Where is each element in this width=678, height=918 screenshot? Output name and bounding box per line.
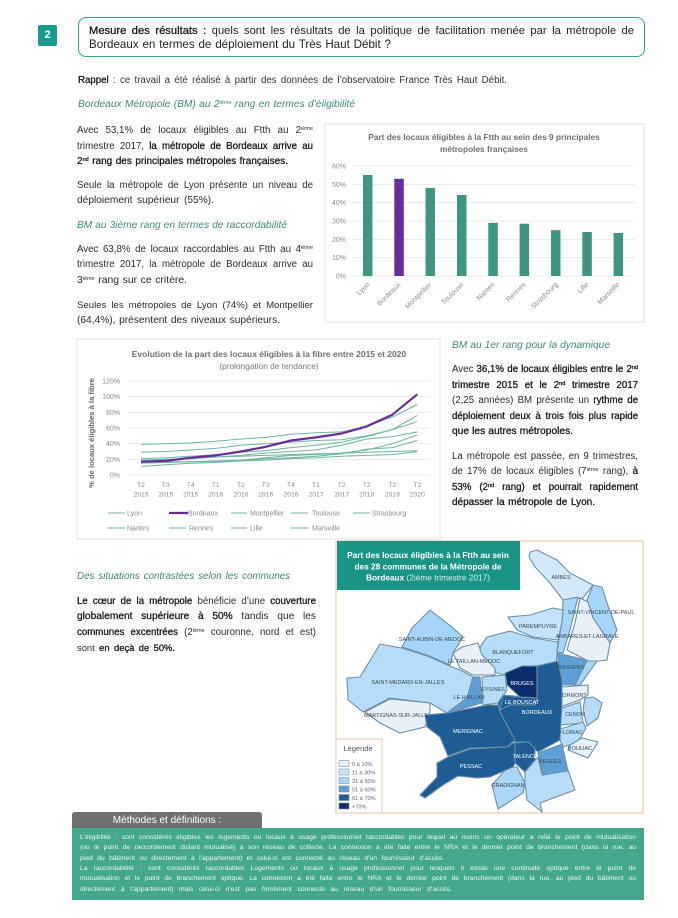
line chart: evolution 2015 to 2020: 2016 [233,492,249,498]
text: connectability figures: trimestre 2017, la métropole de Bordeaux arrive au [77,259,313,270]
map title banner: Bordeaux (2ième trimestre 2017) [366,572,490,582]
commune: Ambès [529,550,593,600]
commune: Floirac [557,722,586,747]
text: progress in 9 quarters: dépasser la métropole de Lyon. [452,497,595,508]
heading: contrasted situations: Des situations contrastées selon les communes [77,571,290,582]
definitions box [72,828,644,900]
bar chart: eligible premises in 9 metropolises: Lyon [356,281,371,297]
commune labels: AMBARES-ET-LAGRAVE [556,634,619,640]
commune labels: BEGLES [539,759,561,765]
text: progress in 9 quarters: 53% (2nd rang) et pourrait rapidement [452,482,638,493]
line chart: evolution 2015 to 2020: T2 [338,482,346,489]
heading: connectability rank: BM au 3ième rang en termes de raccordabilité [77,220,287,231]
text: municipalities coverage: Le cœur de la métropole bénéficie d’une couverture [77,596,316,606]
line chart: evolution 2015 to 2020: T4 [287,482,295,489]
text: deployment pace [452,364,638,437]
commune: Saint-Aubin-de-Médoc [402,610,463,665]
line chart: evolution 2015 to 2020: 2015 [133,492,149,498]
map legend: 11 à 30% [352,770,375,776]
bar chart: eligible premises in 9 metropolises: 20% [332,237,346,244]
commune: Pessac [420,742,517,798]
methods tab heading [72,812,262,828]
line chart: evolution 2015 to 2020: (prolongation de tendance) [219,361,319,371]
line chart: evolution 2015 to 2020: T4 [187,482,195,489]
line chart: evolution 2015 to 2020: 2016 [258,492,273,498]
question box: Bordeaux en termes de déploiement du Très Haut Débit ? [89,38,391,51]
text: progress in 9 quarters [452,450,638,508]
map panel: 28 municipalities: LE BOUSCAT [505,700,540,706]
text: deployment pace: déploiement deux à trois fois plus rapide [452,411,638,422]
definitions box: La raccordabilité : sont considérés raccordables Logements ou locaux à usage professionnel pour lesquels il existe une continuité optique entre le point de [80,865,636,872]
text: higher metropolises [77,300,313,326]
commune: Ambarès-et-Lagrave [567,598,610,662]
line chart: evolution 2015 to 2020: 2015 [158,492,173,498]
map legend: 0 à 10% [352,762,373,768]
line chart: evolution 2015 to 2020: Marseille [312,526,340,532]
commune: Cenon [560,702,583,725]
commune labels: AMBES [551,575,571,581]
commune: Parempuyre [508,608,563,640]
question box [78,17,645,57]
line chart: evolution 2015 to 2020: 0% [110,472,120,480]
question box: Mesure des résultats : quels sont les résultats de la politique de facilitation menée par la métropole de [89,25,634,37]
text: eligibility figures: Avec 53,1% de locaux éligibles au Ftth au 2ième [77,125,313,136]
commune labels: FLOIRAC [559,730,583,736]
line chart: evolution 2015 to 2020: 2016 [208,492,223,498]
commune: Mérignac [425,705,515,756]
commune labels: CENON [565,712,585,718]
line chart: evolution 2015 to 2020: % de locaux éligibles à la fibre [87,378,96,488]
commune labels: LE HAILLAN [453,695,485,701]
commune: Bassens [557,653,587,685]
line chart: evolution 2015 to 2020: 2018 [359,492,374,498]
commune labels: BOULIAC [568,746,592,752]
text: higher metropolises: (64,4%), présentent des niveaux supérieurs. [77,315,280,326]
line chart: evolution 2015 to 2020: Lille [250,526,263,532]
bar chart: eligible premises in 9 metropolises: Rennes [505,281,528,303]
commune: Bègles [538,744,568,775]
bar chart: eligible premises in 9 metropolises: Lille [577,281,590,295]
map legend: +70% [352,804,366,810]
line chart: evolution 2015 to 2020: 40% [106,441,120,448]
commune: Talence [515,742,535,772]
bar chart: eligible premises in 9 metropolises: Part des locaux éligibles à la Ftth au sein des 9 principales [368,132,600,142]
line chart: evolution 2015 to 2020: Strasbourg [372,510,406,518]
map panel: 28 municipalities: BORDEAUX [522,710,553,716]
map legend: 51 à 60% [352,788,376,794]
commune: Artigues [583,697,602,726]
map panel: 28 municipalities: PESSAC [460,764,482,770]
line chart: evolution 2015 to 2020: T2 [363,482,371,489]
commune: Bordeaux [498,661,562,752]
commune labels: PAREMPUYRE [519,624,557,630]
bar chart: eligible premises in 9 metropolises: Nantes [476,281,497,302]
text: Lyon comparison: Seule la métropole de Lyon présente un niveau de [77,180,313,190]
text: eligibility figures: trimestre 2017, la métropole de Bordeaux arrive au [77,141,313,152]
text: progress in 9 quarters: La métropole est passée, en 9 trimestres, [452,450,638,462]
text: progress in 9 quarters: de 17% de locaux éligibles (7ième rang), à [452,466,638,477]
definitions box: directement à l’appartement) mais celui-ci n’est pas forcément connecté au réseau d’un fournisseur d’accès. [80,886,452,893]
definitions box: pied du bâtiment ou directement à l’appartement) et celui-ci est connecté au réseau d’un fournisseur d’accès. [80,854,444,862]
map legend: 31 à 50% [352,779,376,785]
bar chart: eligible premises in 9 metropolises: 50% [332,182,346,189]
line chart: evolution 2015 to 2020: T2 [237,482,245,489]
line chart: evolution 2015 to 2020: T2 [388,482,396,489]
commune labels: SAINT-VINCENT-DE-PAUL [568,610,634,616]
line chart: evolution 2015 to 2020: 2017 [334,492,349,498]
commune: Eysines [482,675,507,705]
line chart: evolution 2015 to 2020: 60% [106,426,120,432]
line chart: evolution 2015 to 2020: Bordeaux [188,510,218,518]
line chart: evolution 2015 to 2020: T1 [312,482,320,489]
bar chart: eligible premises in 9 metropolises: 30% [332,218,346,226]
line chart: evolution 2015 to 2020: T3 [262,482,270,489]
line chart: evolution 2015 to 2020: Toulouse [312,510,340,518]
map title banner [337,541,520,590]
map title banner: Part des locaux éligibles à la Ftth au sein [347,550,509,560]
map panel: 28 municipalities: BRUGES [510,681,534,687]
commune: Saint-Vincent-de-Paul [587,585,617,643]
heading: eligibility rank: Bordeaux Métropole (BM) au 2ième rang en termes d’éligibilité [78,99,355,110]
line chart: evolution 2015 to 2020: 2016 [283,492,299,498]
commune: Lormont [560,685,588,707]
line chart: evolution 2015 to 2020: T3 [162,482,170,489]
bar chart: eligible premises in 9 metropolises: Marseille [597,281,621,306]
bar chart: eligible premises in 9 metropolises: Strasbourg [530,281,559,311]
heading: dynamics rank: BM au 1er rang pour la dynamique [452,340,610,351]
text: deployment pace: (2,25 années) BM présente un rythme de [452,395,638,406]
commune labels: BLANQUEFORT [492,650,534,656]
commune labels: SAINT-MEDARD-EN-JALLES [372,680,445,686]
line chart: evolution 2015 to 2020: Evolution de la part des locaux éligibles à la fibre entre 2015 et 2020 [132,349,406,359]
text: deployment pace: que les autres métropoles. [452,426,573,437]
text: Lyon comparison [77,180,313,206]
commune: Martignas-sur-Jalle [365,699,430,733]
commune: Le Bouscat [500,695,537,710]
text: connectability figures: Avec 63,8% de locaux raccordables au Ftth au 4ième [77,244,313,254]
bar chart: eligible premises in 9 metropolises: 40% [332,200,346,207]
line chart: evolution 2015 to 2020: 80% [106,410,120,417]
commune labels [364,575,634,789]
text: deployment pace: Avec 36,1% de locaux éligibles entre le 2nd [452,364,638,375]
commune: Bouliac [568,738,598,758]
line chart: evolution 2015 to 2020: Nantes [127,526,150,532]
section number badge: 2 [44,29,51,41]
commune: Blanquefort [480,631,558,675]
bar chart: eligible premises in 9 metropolises: Montpellier [404,281,434,311]
line chart: evolution 2015 to 2020: 20% [106,457,120,464]
reminder line: Rappel : ce travail a été réalisé à partir des données de l’observatoire France Très Haut Débit. [78,75,507,86]
text: municipalities coverage: sont en deçà de 50%. [77,642,175,653]
text: higher metropolises: Seules les métropoles de Lyon (74%) et Montpellier [77,300,313,310]
line chart: evolution 2015 to 2020: 2015 [183,492,198,498]
bar chart: eligible premises in 9 metropolises: 60% [332,164,346,170]
definitions box: mutualisation et le point de branchement optique. La connexion a été faite entre le NRA et le dernier point de branchement (dans la rue, au pied du bâtiment ou [80,875,636,882]
text: eligibility figures [77,125,313,167]
text: municipalities coverage: communes excentrées (2ième couronne, nord et est) [77,627,316,638]
line chart: evolution 2015 to 2020: Montpellier [250,510,285,518]
line chart: evolution 2015 to 2020: 2017 [308,492,324,498]
text: deployment pace: trimestre 2015 et le 2nd trimestre 2017 [452,380,638,391]
line chart: evolution 2015 to 2020: 2019 [385,492,400,498]
commune: Carbon-Blanc [575,661,597,685]
commune: Bruges [505,666,537,698]
line chart: evolution 2015 to 2020: 120% [102,378,120,386]
line chart: evolution 2015 to 2020 [76,338,440,540]
map legend: Légende [343,744,373,753]
bar chart: eligible premises in 9 metropolises: 10% [332,255,346,262]
commune: Villenave-d'Ornon [525,757,575,812]
text: municipalities coverage [77,596,316,654]
map legend [336,739,382,813]
text: connectability figures [77,244,313,286]
bar chart: eligible premises in 9 metropolises [324,124,644,322]
definitions box: (ou le point de raccordement distant mutualisé) à son réseau de collecte. La connexion a été faite entre le NRA et le dernier point de branchement (dans la rue, au [80,844,636,851]
map legend: 61 à 70% [352,796,376,802]
map panel: 28 municipalities: TALENCE [513,754,538,760]
commune labels: GRADIGNAN [491,783,525,789]
commune labels: SAINT-AUBIN-DE-MEDOC [399,637,465,643]
line chart: evolution 2015 to 2020: Rennes [189,526,214,532]
commune labels: LORMONT [559,693,587,699]
line chart: evolution 2015 to 2020: 100% [102,394,120,401]
commune: Saint-Louis strip [557,597,578,653]
line chart: evolution 2015 to 2020: Lyon [127,510,142,518]
map panel: 28 municipalities [335,540,644,814]
text: eligibility figures: 2nd rang des principales métropoles françaises. [77,156,288,167]
commune: Le Taillan-Médoc [453,643,495,675]
map panel: 28 municipalities: MERIGNAC [453,729,483,735]
commune: Gradignan [492,767,525,809]
text: Lyon comparison: déploiement supérieur (55%). [77,195,214,206]
bar chart: eligible premises in 9 metropolises: métropoles françaises [440,144,528,154]
commune labels: BASSENS [558,665,584,671]
text: municipalities coverage: globalement supérieure à 50% tandis que les [77,611,316,622]
bar chart: eligible premises in 9 metropolises: Bordeaux [376,281,403,308]
commune: Saint-Médard-en-Jalles [347,644,473,713]
commune labels: EYSINES [481,687,505,693]
definitions box: L’éligibilité : sont considérés éligibles les logements ou locaux à usage professionnel raccordables pour lequel au moins un opérateur a relié le point de mutualisation [80,834,636,840]
line chart: evolution 2015 to 2020: T1 [212,482,220,489]
bar chart: eligible premises in 9 metropolises: Toulouse [441,281,465,306]
commune: Le Haillan [448,677,482,713]
commune labels: MARTIGNAS-SUR-JALLE [364,713,428,719]
section number badge [38,25,57,46]
line chart: evolution 2015 to 2020: T2 [413,482,421,489]
methods tab heading: Méthodes et définitions : [113,815,221,826]
line chart: evolution 2015 to 2020: T2 [137,482,145,489]
commune labels: LE TAILLAN-MEDOC [448,659,500,665]
bar chart: eligible premises in 9 metropolises: 0% [336,274,346,280]
map title banner: des 28 communes de la Métropole de [354,562,502,572]
text: connectability figures: 3ième rang sur ce critère. [77,275,187,286]
line chart: evolution 2015 to 2020: 2020 [410,492,425,498]
